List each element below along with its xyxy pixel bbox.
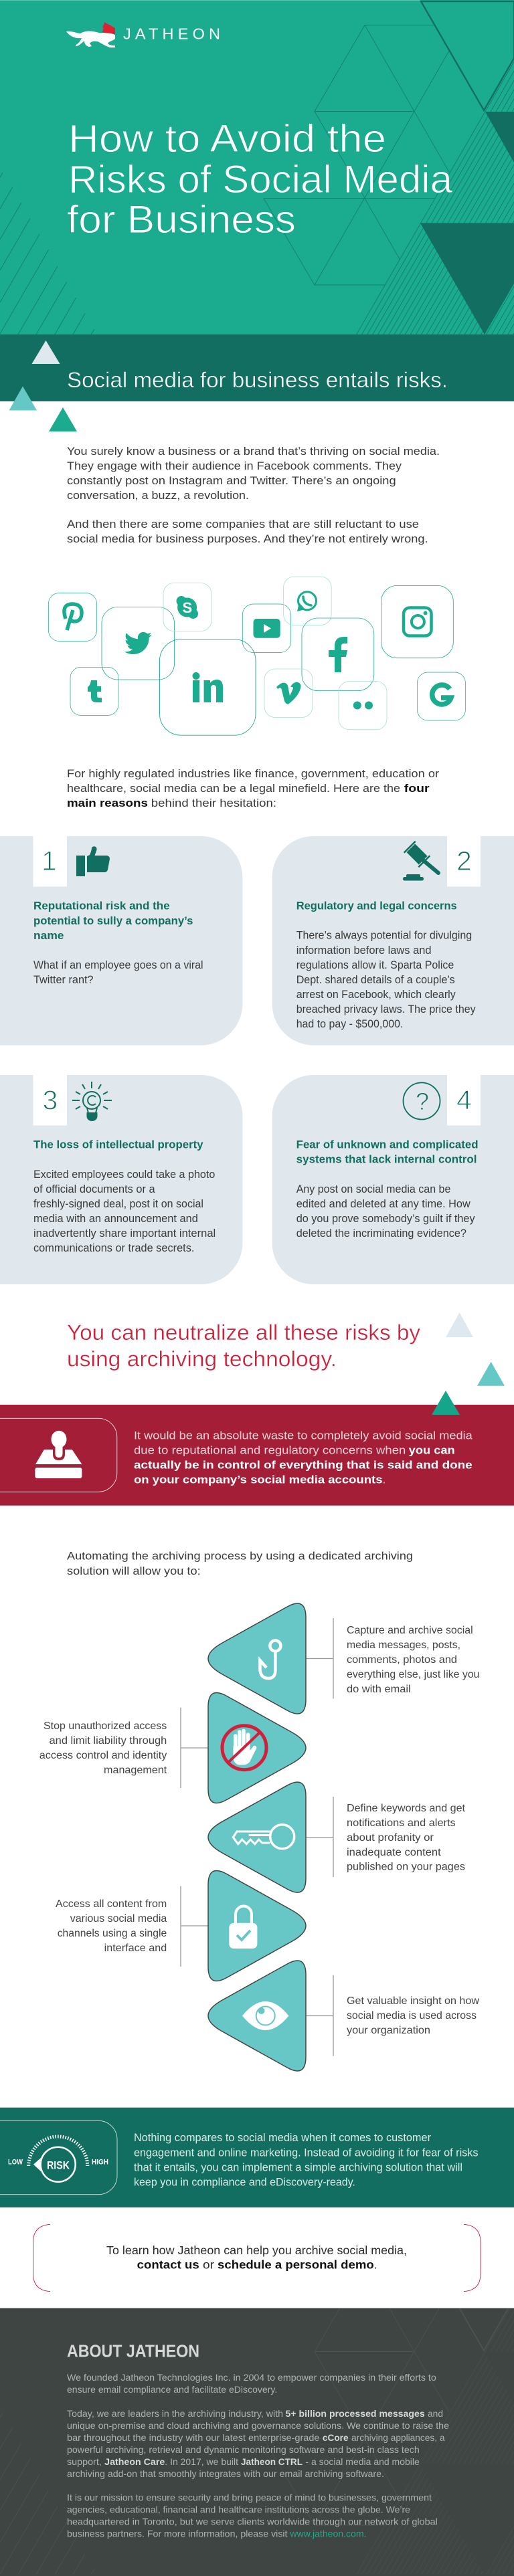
callout text: that it entails, you can implement a simple archiving solution that will — [134, 2161, 462, 2173]
about text: Jatheon CTRL — [241, 2456, 303, 2467]
body text: freshly-signed deal, post it on social — [33, 1198, 203, 1210]
geometric background pattern — [0, 1, 514, 334]
text — [347, 1625, 479, 1695]
connector — [306, 1975, 333, 2056]
about text: Today, we are leaders in the archiving industry, with — [67, 2408, 283, 2419]
number 1: 1 — [41, 846, 57, 876]
icon: joystick — [35, 1431, 82, 1478]
heading: potential to sully a company’s — [33, 915, 193, 927]
body text — [33, 1169, 216, 1254]
body text — [33, 959, 203, 986]
about text: unique on-premise and cloud archiving and governance solutions. We continue to raise the — [67, 2420, 449, 2431]
triangle — [208, 1782, 306, 1892]
icon: key — [233, 1825, 294, 1849]
icon: youtube — [242, 604, 290, 653]
text — [347, 1995, 479, 2036]
call to action — [33, 2224, 481, 2292]
benefit 3: keywords — [208, 1782, 466, 1892]
background pattern — [0, 2308, 509, 2575]
about text: business partners. For more information, please visit — [67, 2529, 288, 2539]
heading — [33, 900, 193, 942]
icon: google — [417, 672, 465, 720]
about text: headquartered in Toronto, but we serve clients worldwide through our network of global — [67, 2516, 438, 2527]
panel: reason 2 — [272, 836, 514, 1046]
cta text: . — [374, 2258, 377, 2272]
body text: information before laws and — [296, 945, 431, 957]
body text: communications or trade secrets. — [33, 1242, 194, 1254]
text — [39, 1720, 167, 1776]
intro paragraphs — [67, 445, 440, 545]
body text: do you prove somebody’s guilt if they — [296, 1213, 475, 1225]
icon frame — [0, 1418, 117, 1492]
icon: flickr — [339, 681, 387, 730]
triangle — [208, 1961, 306, 2071]
icon: risk gauge — [8, 2137, 108, 2182]
cta text: To learn how Jatheon can help you archive social media, — [106, 2244, 407, 2257]
body text: had to pay - $500,000. — [296, 1018, 403, 1030]
text: channels using a single — [58, 1928, 167, 1939]
intro paragraphs: social media for business purposes. And they’re not entirely wrong. — [67, 533, 428, 545]
text: everything else, just like you — [347, 1669, 479, 1680]
triangle — [208, 1870, 306, 1981]
intro paragraphs: They engage with their audience in Facebook comments. They — [67, 460, 402, 472]
logo — [66, 22, 220, 47]
about text: . In 2017, we built — [165, 2456, 238, 2467]
heading: systems that lack internal control — [296, 1154, 477, 1166]
cta text: schedule a personal demo — [218, 2258, 374, 2272]
callout text: keep you in compliance and eDiscovery-ready. — [134, 2175, 355, 2189]
about text: archiving appliances, a — [351, 2432, 445, 2443]
icon: hand in no sign — [222, 1726, 266, 1770]
about heading: ABOUT JATHEON — [67, 2341, 199, 2361]
panel: reason 3 — [0, 1075, 242, 1284]
text: interface and — [104, 1943, 167, 1954]
body text: Twitter rant? — [33, 974, 94, 986]
about text: support, — [67, 2456, 102, 2467]
icon: whatsapp — [284, 577, 331, 625]
cta text — [106, 2244, 407, 2272]
text: about profanity or — [347, 1832, 434, 1844]
connector — [306, 1797, 333, 1877]
callout text: It would be an absolute waste to completely avoid social media — [134, 1429, 473, 1442]
callout text: Nothing compares to social media when it comes to customer — [134, 2131, 431, 2144]
about text: ensure email compliance and facilitate eDiscovery. — [67, 2384, 277, 2395]
header panel — [0, 0, 514, 334]
text: Access all content from — [56, 1898, 167, 1910]
reasons lead-in: For highly regulated industries like finance, government, education or — [67, 768, 440, 780]
reasons lead-in: main reasons — [67, 797, 148, 809]
heading — [296, 1139, 478, 1166]
automation lead-in: Automating the archiving process by using a dedicated archiving — [67, 1551, 413, 1563]
text: access control and identity — [39, 1750, 167, 1761]
icon: instagram — [381, 585, 453, 658]
heading: Reputational risk and the — [33, 900, 170, 912]
text: do with email — [347, 1684, 411, 1695]
decorative triangles — [432, 1312, 505, 1415]
icon: question mark — [403, 1082, 440, 1120]
icon: gavel — [403, 841, 438, 880]
text: various social media — [70, 1913, 167, 1924]
icon: risk gauge: RISK — [47, 2159, 70, 2171]
icon: pinterest — [48, 593, 96, 641]
body text: There’s always potential for divulging — [296, 930, 472, 942]
body text: inadvertently share important internal — [33, 1227, 216, 1240]
callout text: engagement and online marketing. Instead of avoiding it for fear of risks — [134, 2146, 478, 2159]
intro paragraphs: And then there are some companies that are still reluctant to use — [67, 518, 419, 530]
title: for Business — [67, 198, 296, 241]
text: management — [104, 1765, 167, 1776]
number 4: 4 — [456, 1085, 472, 1116]
icon: tumblr — [70, 667, 118, 715]
panel: green callout — [0, 2108, 514, 2207]
about text: archiving add-on that smoothly integrates with our email archiving software. — [67, 2468, 384, 2479]
intro paragraphs: conversation, a buzz, a revolution. — [67, 490, 249, 502]
heading: Regulatory and legal concerns — [296, 900, 457, 912]
social media icon cluster — [48, 577, 465, 735]
connector — [306, 1618, 333, 1699]
icon: risk gauge: LOW — [8, 2159, 23, 2167]
number 3: 3 — [43, 1085, 58, 1116]
red headline: using archiving technology. — [67, 1347, 337, 1371]
red headline — [67, 1320, 420, 1371]
benefit 4: single interface — [56, 1870, 306, 1981]
callout text — [134, 1429, 473, 1486]
cta text: contact us — [137, 2258, 199, 2272]
cta text: or — [203, 2258, 214, 2272]
body text: of official documents or a — [33, 1183, 155, 1195]
heading: Fear of unknown and complicated — [296, 1139, 478, 1151]
body text: What if an employee goes on a viral — [33, 959, 203, 971]
logo: JATHEON — [123, 25, 220, 43]
text: published on your pages — [347, 1862, 465, 1873]
title: Risks of Social Media — [68, 158, 453, 201]
connector — [181, 1708, 208, 1788]
callout text — [134, 2131, 478, 2189]
reasons lead-in: healthcare, social media can be a legal minefield. Here are the — [67, 783, 400, 795]
icon: facebook — [302, 618, 374, 691]
text: Get valuable insight on how — [347, 1995, 479, 2007]
icon: skype — [163, 583, 211, 631]
body text: deleted the incriminating evidence? — [296, 1227, 466, 1240]
heading: name — [33, 930, 64, 942]
number 2: 2 — [456, 846, 472, 876]
triangle — [208, 1692, 306, 1803]
body text: Dept. shared details of a couple’s — [296, 974, 455, 986]
callout text: actually be in control of everything that is said and done — [134, 1459, 473, 1472]
body text: media with an announcement and — [33, 1213, 198, 1225]
callout text: due to reputational and regulatory concerns when — [134, 1444, 406, 1457]
panel: red callout — [0, 1405, 514, 1506]
panel: about — [0, 2308, 514, 2576]
about text: We founded Jatheon Technologies Inc. in 2004 to empower companies in their efforts to — [67, 2372, 436, 2383]
text: inadequate content — [347, 1847, 441, 1858]
triangle — [208, 1603, 306, 1714]
text: Capture and archive social — [347, 1625, 473, 1636]
reasons lead-in — [67, 768, 440, 809]
section banner — [0, 334, 514, 401]
icon: light bulb — [72, 1082, 112, 1120]
icon: risk gauge: HIGH — [92, 2159, 108, 2167]
icon: linkedin — [159, 639, 256, 735]
body text: regulations allow it. Sparta Police — [296, 959, 454, 971]
text: and limit liability through — [50, 1735, 167, 1747]
icon: question mark: ? — [416, 1088, 429, 1115]
text — [347, 1803, 466, 1873]
panel: reason 4 — [272, 1075, 514, 1284]
heading: The loss of intellectual property — [33, 1139, 203, 1151]
icon: hook — [260, 1640, 280, 1678]
red headline: You can neutralize all these risks by — [67, 1320, 420, 1345]
automation lead-in — [67, 1551, 413, 1577]
text: social media is used across — [347, 2010, 477, 2021]
about text: cCore — [323, 2432, 349, 2443]
reasons lead-in: four — [404, 783, 430, 795]
benefit 1: capture — [208, 1603, 479, 1714]
reasons lead-in: behind their hesitation: — [151, 797, 276, 809]
callout text: on your company’s social media accounts — [134, 1474, 383, 1486]
about text — [67, 2372, 449, 2539]
about text: Jatheon Care — [104, 2456, 165, 2467]
icon: padlock — [229, 1906, 257, 1949]
icon: twitter — [102, 607, 174, 680]
body text: edited and deleted at any time. How — [296, 1198, 470, 1210]
automation lead-in: solution will allow you to: — [67, 1565, 201, 1577]
text: Define keywords and get — [347, 1803, 466, 1814]
body text: Excited employees could take a photo — [33, 1169, 215, 1181]
body text — [296, 930, 476, 1030]
panel: reason 1 — [0, 836, 242, 1046]
body text — [296, 1183, 475, 1240]
title — [67, 117, 453, 241]
text: your organization — [347, 2025, 430, 2036]
decorative triangles — [9, 340, 77, 431]
about text: powerful archiving, retrieval and dynamic monitoring software and best-in class tech — [67, 2444, 420, 2455]
body text: breached privacy laws. The price they — [296, 1003, 476, 1015]
brackets — [33, 2224, 481, 2292]
about text: 5+ billion processed messages — [285, 2408, 425, 2419]
icon: vimeo — [264, 669, 313, 717]
text: media messages, posts, — [347, 1640, 460, 1651]
callout text: . — [383, 1474, 386, 1486]
text — [56, 1898, 167, 1954]
about text: agencies, educational, financial and healthcare institutions across the globe. We’re — [67, 2504, 410, 2515]
icon: skype: S — [182, 599, 192, 616]
callout text: you can — [409, 1444, 455, 1457]
intro paragraphs: You surely know a business or a brand that’s thriving on social media. — [67, 445, 440, 458]
text: notifications and alerts — [347, 1817, 456, 1829]
icon: eye — [242, 2001, 288, 2030]
text: Stop unauthorized access — [44, 1720, 167, 1732]
about text: www.jatheon.com. — [289, 2529, 367, 2539]
title: How to Avoid the — [68, 117, 386, 161]
text: comments, photos and — [347, 1654, 457, 1666]
icon: thumbs up — [76, 846, 110, 876]
intro paragraphs: constantly post on Instagram and Twitter. There’s an ongoing — [67, 475, 396, 487]
about text: bar throughout the industry with our latest enterprise-grade — [67, 2432, 320, 2443]
about text: - a social media and mobile — [305, 2456, 420, 2467]
icon frame — [0, 2120, 117, 2195]
benefit 2: stop access — [39, 1692, 306, 1803]
benefit 5: insight — [208, 1961, 479, 2071]
banner heading: Social media for business entails risks. — [67, 368, 448, 392]
body text: Any post on social media can be — [296, 1183, 450, 1195]
about text: and — [428, 2408, 443, 2419]
body text: arrest on Facebook, which clearly — [296, 989, 456, 1001]
connector — [181, 1886, 208, 1967]
about text: It is our mission to ensure security and bring peace of mind to businesses, government — [67, 2492, 432, 2503]
